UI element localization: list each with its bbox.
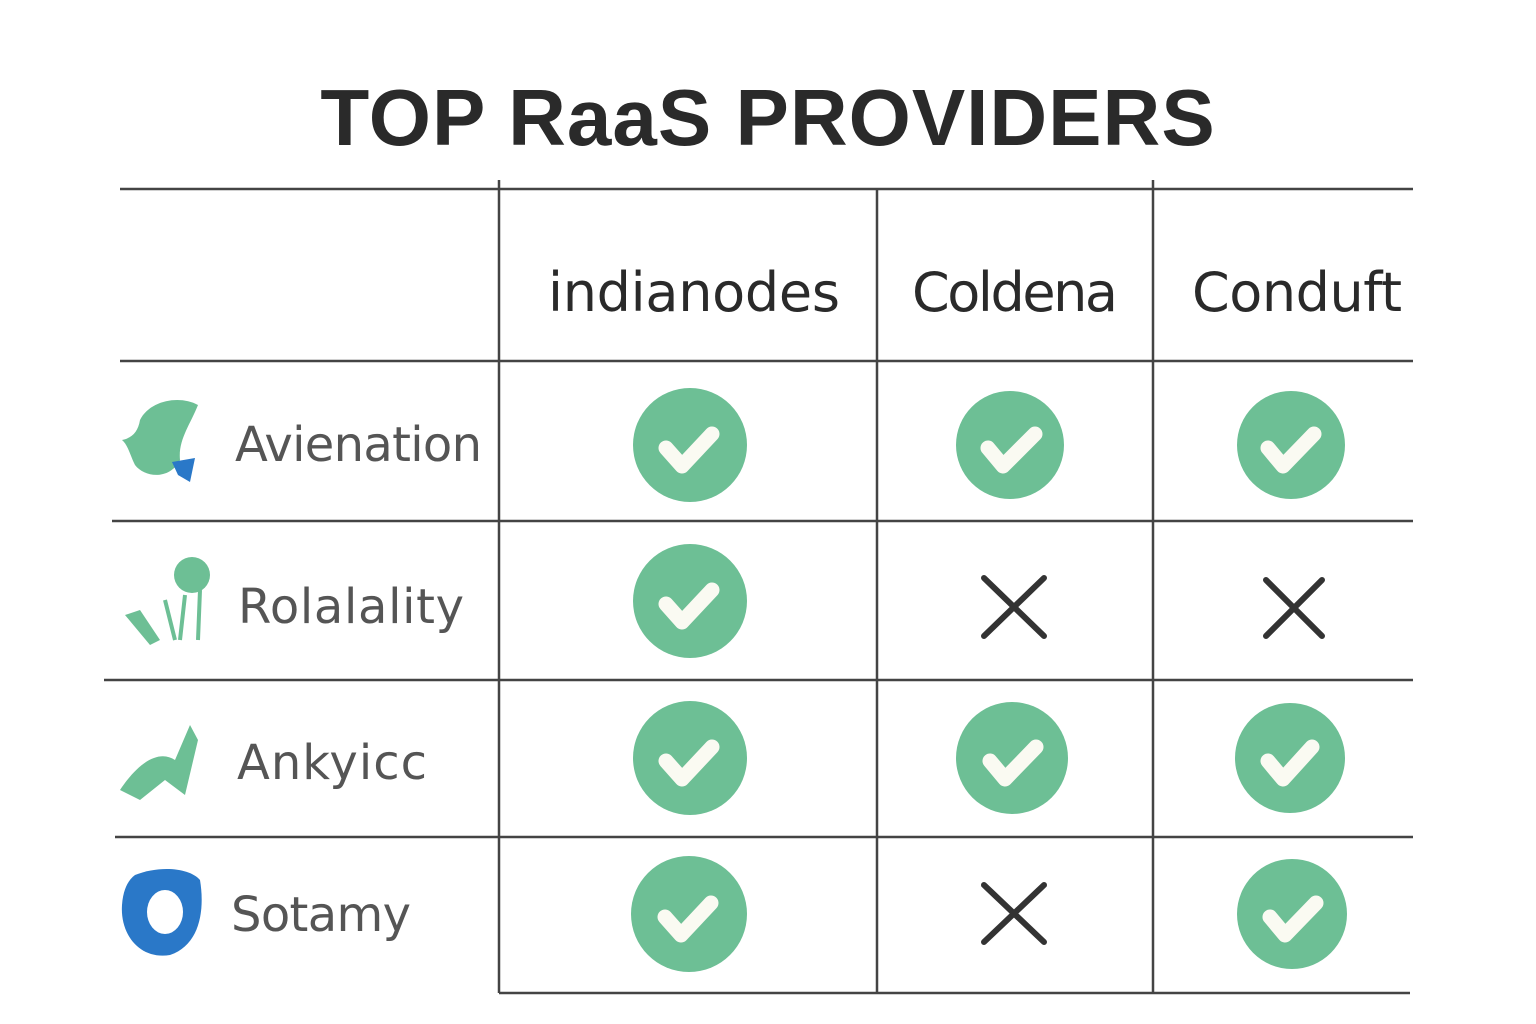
header: providers — [548, 261, 1402, 324]
row labels: Sotamy — [231, 887, 411, 943]
header: providers: indianodes — [548, 261, 840, 324]
header: providers: Coldena — [912, 261, 1118, 324]
row labels: Ankyicc — [237, 735, 427, 791]
row labels — [231, 417, 482, 943]
icon: green sketch — [120, 725, 198, 800]
header: providers: Conduft — [1192, 261, 1402, 324]
icon: green bird — [122, 400, 198, 482]
icon: blue ring — [122, 869, 202, 956]
row labels: Rolalality — [238, 579, 464, 635]
status marks — [631, 388, 1347, 972]
row labels: Avienation — [235, 417, 482, 473]
icon: green plant — [125, 557, 210, 645]
title: TOP RaaS PROVIDERS — [320, 73, 1216, 162]
